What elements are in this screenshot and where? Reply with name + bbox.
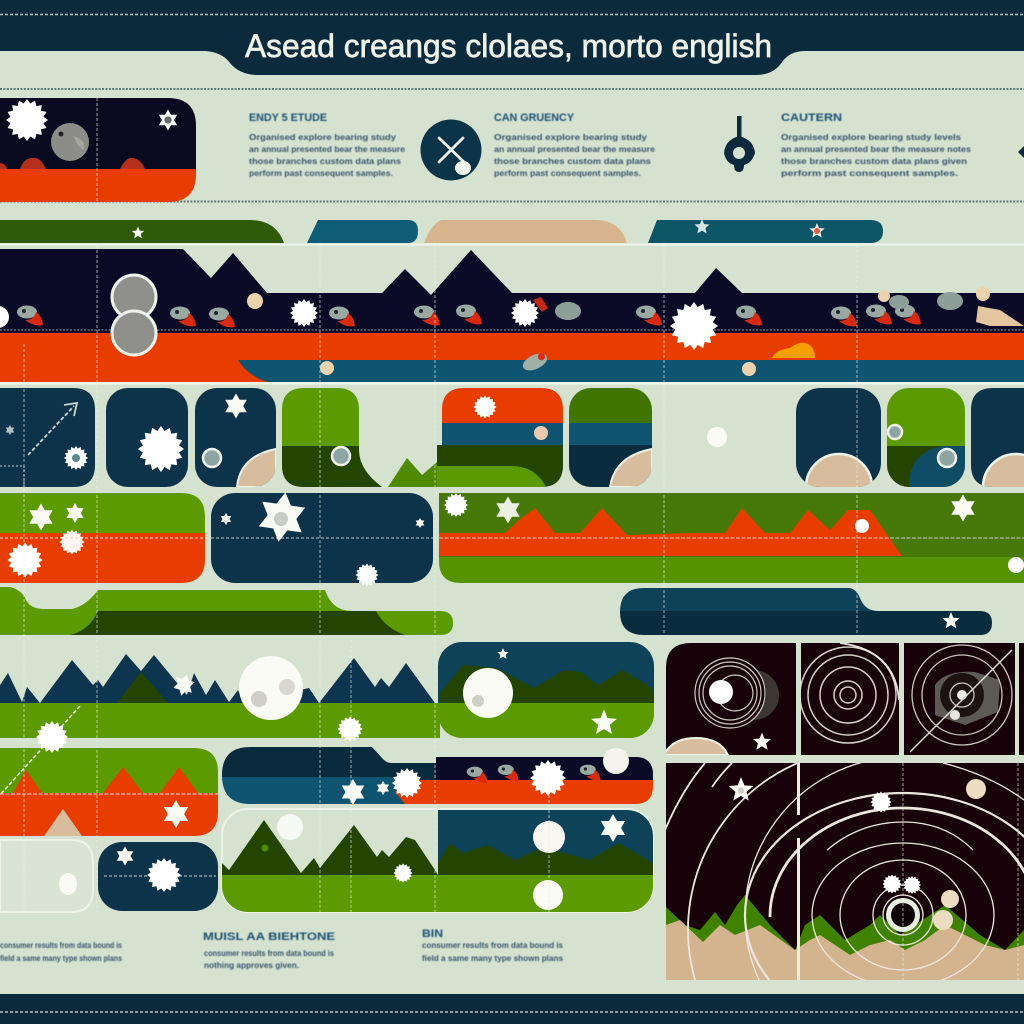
tile: star and dune xyxy=(195,388,276,487)
text block: bottom centre: consumer results from data bound is xyxy=(204,949,335,958)
panel: night hills xyxy=(438,642,654,738)
text block: second column: those branches custom data plans xyxy=(494,157,652,166)
tile: green and teal xyxy=(887,388,965,487)
text block: bottom right xyxy=(422,928,564,963)
panel: night transition strip xyxy=(222,747,653,805)
text block: bottom centre xyxy=(203,931,335,970)
text block: bottom left xyxy=(0,941,122,963)
text block: second column: perform past consequent samples. xyxy=(494,169,641,178)
icon: sun xyxy=(6,99,48,141)
icon: grey fish xyxy=(937,292,963,310)
panel: navy sun tile xyxy=(98,842,218,911)
icon: grey fish xyxy=(555,302,581,320)
text block: second column: CAN GRUENCY xyxy=(494,112,575,124)
icon: star xyxy=(132,226,144,238)
panel: navy star tile xyxy=(211,489,433,586)
icon: star xyxy=(729,777,753,801)
text block: first column: an annual presented bear the measure xyxy=(249,145,406,154)
arrow: dashed diagonal with burst xyxy=(0,706,80,795)
text block: first column: those branches custom data plans xyxy=(249,157,402,166)
panel: mountain range xyxy=(0,642,654,742)
black hole core xyxy=(886,898,920,932)
icon: red marker xyxy=(809,223,825,237)
panel: top orbit tile three xyxy=(904,643,1015,755)
strip of capsules xyxy=(0,219,883,243)
text block: first column: perform past consequent samples. xyxy=(249,169,393,178)
icon: star xyxy=(694,219,710,233)
tile: striped with dune xyxy=(569,388,652,487)
icon: cream blobs xyxy=(933,779,986,930)
text block: bottom left: field a same many type shown plans xyxy=(0,954,122,963)
tile: dome xyxy=(796,388,881,487)
text block: bottom right: consumer results from data bound is xyxy=(422,941,564,950)
panel: top orbit tile two xyxy=(800,643,899,755)
panel: peaks tile xyxy=(0,748,218,836)
text block: first column: Organised explore bearing study xyxy=(249,133,397,142)
vertical dashed guides xyxy=(24,245,857,912)
orbit panel dividers xyxy=(797,763,1018,980)
text block: bottom right: field a same many type shown plans xyxy=(422,954,564,963)
icon: twin moons xyxy=(112,275,156,355)
text block: third column: perform past consequent samples. xyxy=(781,169,958,178)
panel: mountain night band xyxy=(0,249,1024,382)
title: Asead creangs clolaes, morto english xyxy=(245,28,772,64)
capsule: dark green xyxy=(0,220,284,243)
panel: partial orbit tile xyxy=(1019,643,1024,755)
panel: night scene top left xyxy=(0,98,196,202)
panel: large orbit scene xyxy=(665,748,1024,987)
icon: white dot xyxy=(707,427,727,447)
panel: row of rounded tiles xyxy=(0,388,1024,487)
text block: bottom centre: MUISL AA BIEHTONE xyxy=(203,931,335,943)
icon: pin marker xyxy=(724,116,755,172)
orbit rings xyxy=(665,748,1024,987)
text block: third column: Organised explore bearing study levels xyxy=(781,133,962,142)
tan ground xyxy=(666,920,1024,980)
panel: forest and night tile xyxy=(222,809,653,912)
panel: orange peaks band xyxy=(439,493,1024,583)
panel: green strip xyxy=(0,587,453,635)
icon: twin bursts xyxy=(882,874,921,894)
green jagged ridge xyxy=(666,895,1024,955)
text block: bottom left: consumer results from data bound is xyxy=(0,941,122,950)
creatures row xyxy=(17,304,921,327)
icon: bursts xyxy=(290,299,718,350)
panel: green and orange tile xyxy=(0,493,205,583)
icon: red fragment xyxy=(533,297,548,312)
icon: full moon xyxy=(239,656,303,720)
tile: green hill xyxy=(282,388,437,487)
text block: second column xyxy=(494,112,656,178)
capsule: long teal xyxy=(648,220,883,243)
icon: burst on ring xyxy=(870,792,892,812)
panel: pale tile xyxy=(0,840,93,912)
text block: third column: an annual presented bear the measure notes xyxy=(781,145,972,154)
icon: moon xyxy=(51,123,89,161)
footer bar xyxy=(0,994,1024,1024)
text block: third column xyxy=(781,112,972,178)
icon: rocket xyxy=(520,350,550,374)
header banner xyxy=(0,0,1024,75)
icon: orange mound xyxy=(772,343,815,358)
icon: crossed tools circle xyxy=(420,120,482,180)
icon: peach dots xyxy=(247,287,1024,376)
text block: first column xyxy=(249,112,406,178)
text block: second column: an annual presented bear the measure xyxy=(494,145,656,154)
text block: third column: CAUTERN xyxy=(781,112,842,124)
panel: navy strip xyxy=(620,588,992,635)
icon: small star xyxy=(159,110,177,130)
tile: right dome xyxy=(971,388,1024,487)
text block: bottom right: BIN xyxy=(422,928,443,940)
icon: grey fish xyxy=(889,295,909,309)
icon: left sun xyxy=(0,306,9,328)
icon: cut-off marker at right edge xyxy=(1018,146,1024,158)
capsule: tan xyxy=(424,220,627,243)
capsule: teal xyxy=(307,220,418,243)
tile: arrow xyxy=(0,388,95,487)
text block: second column: Organised explore bearing study xyxy=(494,133,648,142)
tile: striped xyxy=(437,388,563,487)
panel: top orbit tile one xyxy=(664,643,796,755)
text block: third column: those branches custom data plans given xyxy=(781,157,967,166)
text block: first column: ENDY 5 ETUDE xyxy=(249,112,327,124)
text block: bottom centre: nothing approves given. xyxy=(204,961,299,970)
tile: sun xyxy=(106,388,188,487)
